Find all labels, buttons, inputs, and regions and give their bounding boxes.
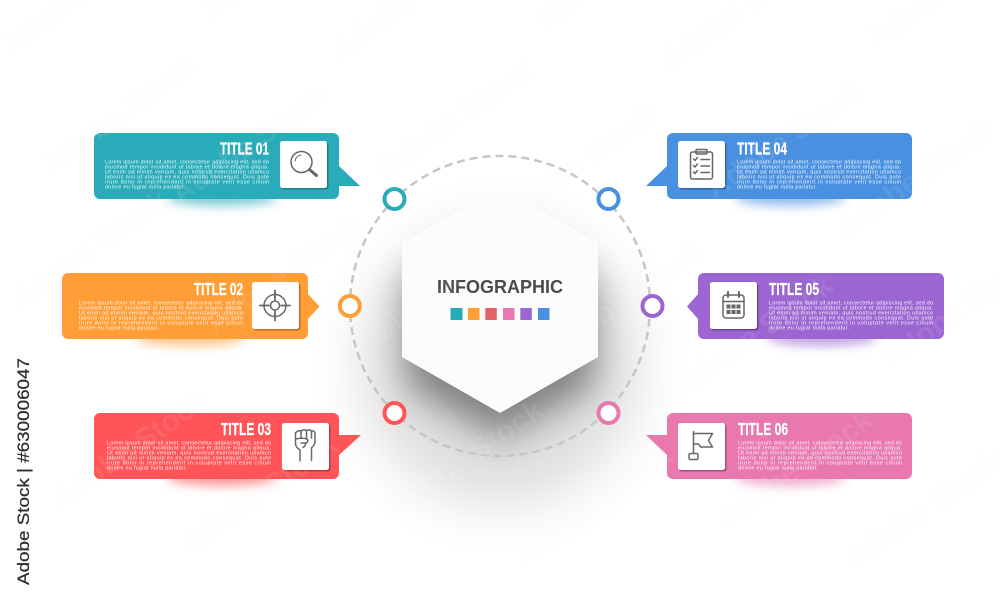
watermark pattern: Adobe Stock (710, 403, 879, 536)
body text 03: Ut enim ad minim veniam, quis nostrud exercitation ullamco (107, 451, 271, 457)
watermark pattern: Adobe Stock (830, 113, 999, 246)
body text 05: irure dolor in reprehenderit in voluptate velit esse cillum (769, 320, 934, 326)
body text 05: Ut enim ad minim veniam, quis nostrud exercitation ullamco (769, 311, 933, 317)
body text 04: Lorem ipsum dolor sit amet, consectetur adipiscing elit, sed do (737, 160, 901, 166)
body text 06: irure dolor in reprehenderit in voluptate velit esse cillum (738, 460, 902, 466)
panel: title 06 (646, 413, 912, 486)
body text 05: laboris nisi ut aliquip ex ea commodo consequat. Duis aute (769, 316, 933, 322)
hexagon close shadow (406, 230, 594, 438)
body text 02 (79, 301, 244, 332)
heading 02: TITLE 02 (194, 279, 243, 299)
body text 05: eiusmod tempor incididunt ut labore et dolore magna aliqua. (769, 306, 933, 312)
watermark pattern: Adobe Stock (370, 53, 539, 186)
panel: title 03 (94, 413, 361, 486)
body text 03: Lorem ipsum dolor sit amet, consectetur adipiscing elit, sed do (107, 441, 271, 447)
watermark pattern: Adobe Stock (670, 268, 839, 401)
body text 04: dolore eu fugiat nulla pariatur. (737, 184, 817, 190)
body text 03: laboris nisi ut aliquip ex ea commodo consequat. Duis aute (107, 456, 271, 462)
watermark pattern: Adobe Stock (335, 238, 504, 371)
body text 02: dolore eu fugiat nulla pariatur. (79, 326, 159, 332)
heading 06: TITLE 06 (738, 419, 788, 439)
icon: raised fist (282, 423, 330, 472)
body text 05: dolore eu fugiat nulla pariatur. (769, 326, 849, 332)
panel: title 05 (687, 273, 944, 346)
watermark pattern: Adobe Stock (510, 438, 679, 571)
icon: target (252, 282, 300, 330)
watermark pattern: Adobe Stock (540, 233, 709, 366)
watermark pattern: Adobe Stock (700, 73, 869, 206)
body text 04: irure dolor in reprehenderit in voluptate velit esse cillum (737, 180, 902, 186)
body text 02: Lorem ipsum dolor sit amet, consectetur adipiscing elit, sed do (79, 301, 243, 307)
body text 01: eiusmod tempor incididunt ut labore et dolore magna aliqua. (105, 165, 269, 171)
stock image id: Adobe Stock | #630006047 (14, 358, 33, 585)
heading 01: TITLE 01 (220, 138, 269, 158)
body text 06: laboris nisi ut aliquip ex ea commodo consequat. Duis aute (738, 456, 902, 462)
connector dot 05 (642, 296, 662, 316)
body text 01 (105, 160, 270, 190)
colour key squares (450, 308, 550, 320)
body text 01: dolore eu fugiat nulla pariatur. (105, 184, 185, 190)
body text 06: Ut enim ad minim veniam, quis nostrud exercitation ullamco (738, 451, 902, 457)
watermark pattern: Adobe Stock (5, 183, 174, 316)
watermark pattern: Adobe Stock (380, 393, 549, 526)
heading 03: TITLE 03 (221, 419, 271, 439)
body text 02: irure dolor in reprehenderit in voluptate velit esse cillum (79, 320, 244, 326)
icon: calendar (710, 282, 758, 330)
heading 04: TITLE 04 (737, 138, 787, 158)
body text 06 (738, 441, 902, 472)
heading 05: TITLE 05 (769, 279, 819, 299)
body text 01: irure dolor in reprehenderit in voluptate velit esse cillum (105, 180, 270, 186)
panel: title 04 (646, 133, 912, 206)
body text 01: laboris nisi ut aliquip ex ea commodo consequat. Duis aute (105, 175, 269, 181)
dashed ring (350, 156, 650, 456)
panel: title 01 (94, 133, 360, 206)
watermark pattern: Adobe Stock (45, 383, 214, 516)
body text 03: irure dolor in reprehenderit in voluptate velit esse cillum (107, 460, 272, 466)
body text 06: Lorem ipsum dolor sit amet, consectetur adipiscing elit, sed do (738, 441, 902, 447)
connector dot 03 (384, 403, 404, 423)
body text 05: Lorem ipsum dolor sit amet, consectetur adipiscing elit, sed do (769, 301, 933, 307)
panel: title 02 (62, 273, 320, 346)
watermark pattern: Adobe Stock (165, 78, 334, 211)
body text 05 (769, 301, 934, 332)
watermark pattern: Adobe Stock (495, 98, 664, 231)
body text 02: laboris nisi ut aliquip ex ea commodo consequat. Duis aute (79, 316, 243, 322)
connector dot 02 (340, 296, 360, 316)
body text 01: Lorem ipsum dolor sit amet, consectetur adipiscing elit, sed do (105, 160, 269, 166)
watermark pattern: Adobe Stock (35, 48, 204, 181)
body text 01: Ut enim ad minim veniam, quis nostrud exercitation ullamco (105, 170, 269, 176)
hexagon wide shadow (360, 225, 640, 505)
body text 06: dolore eu fugiat nulla pariatur. (738, 466, 818, 472)
icon: magnifier (280, 141, 328, 190)
connector dot 06 (598, 403, 618, 423)
connector dot 01 (384, 189, 404, 209)
icon: flag (678, 423, 726, 472)
central hexagon (402, 187, 598, 413)
body text 06: eiusmod tempor incididunt ut labore et dolore magna aliqua. (738, 446, 902, 452)
body text 04: eiusmod tempor incididunt ut labore et dolore magna aliqua. (737, 165, 901, 171)
body text 03 (107, 441, 272, 472)
icon: clipboard checklist (678, 141, 726, 190)
body text 04: Ut enim ad minim veniam, quis nostrud exercitation ullamco (737, 170, 901, 176)
body text 02: eiusmod tempor incididunt ut labore et dolore magna aliqua. (79, 306, 243, 312)
watermark pattern: Adobe Stock (200, 208, 369, 341)
connector dot 04 (598, 189, 618, 209)
watermark pattern: Adobe Stock (175, 428, 344, 561)
central heading: INFOGRAPHIC (437, 277, 563, 297)
body text 03: eiusmod tempor incididunt ut labore et dolore magna aliqua. (107, 446, 271, 452)
body text 04 (737, 160, 902, 190)
body text 03: dolore eu fugiat nulla pariatur. (107, 466, 187, 472)
body text 02: Ut enim ad minim veniam, quis nostrud exercitation ullamco (79, 311, 243, 317)
body text 04: laboris nisi ut aliquip ex ea commodo consequat. Duis aute (737, 175, 901, 181)
